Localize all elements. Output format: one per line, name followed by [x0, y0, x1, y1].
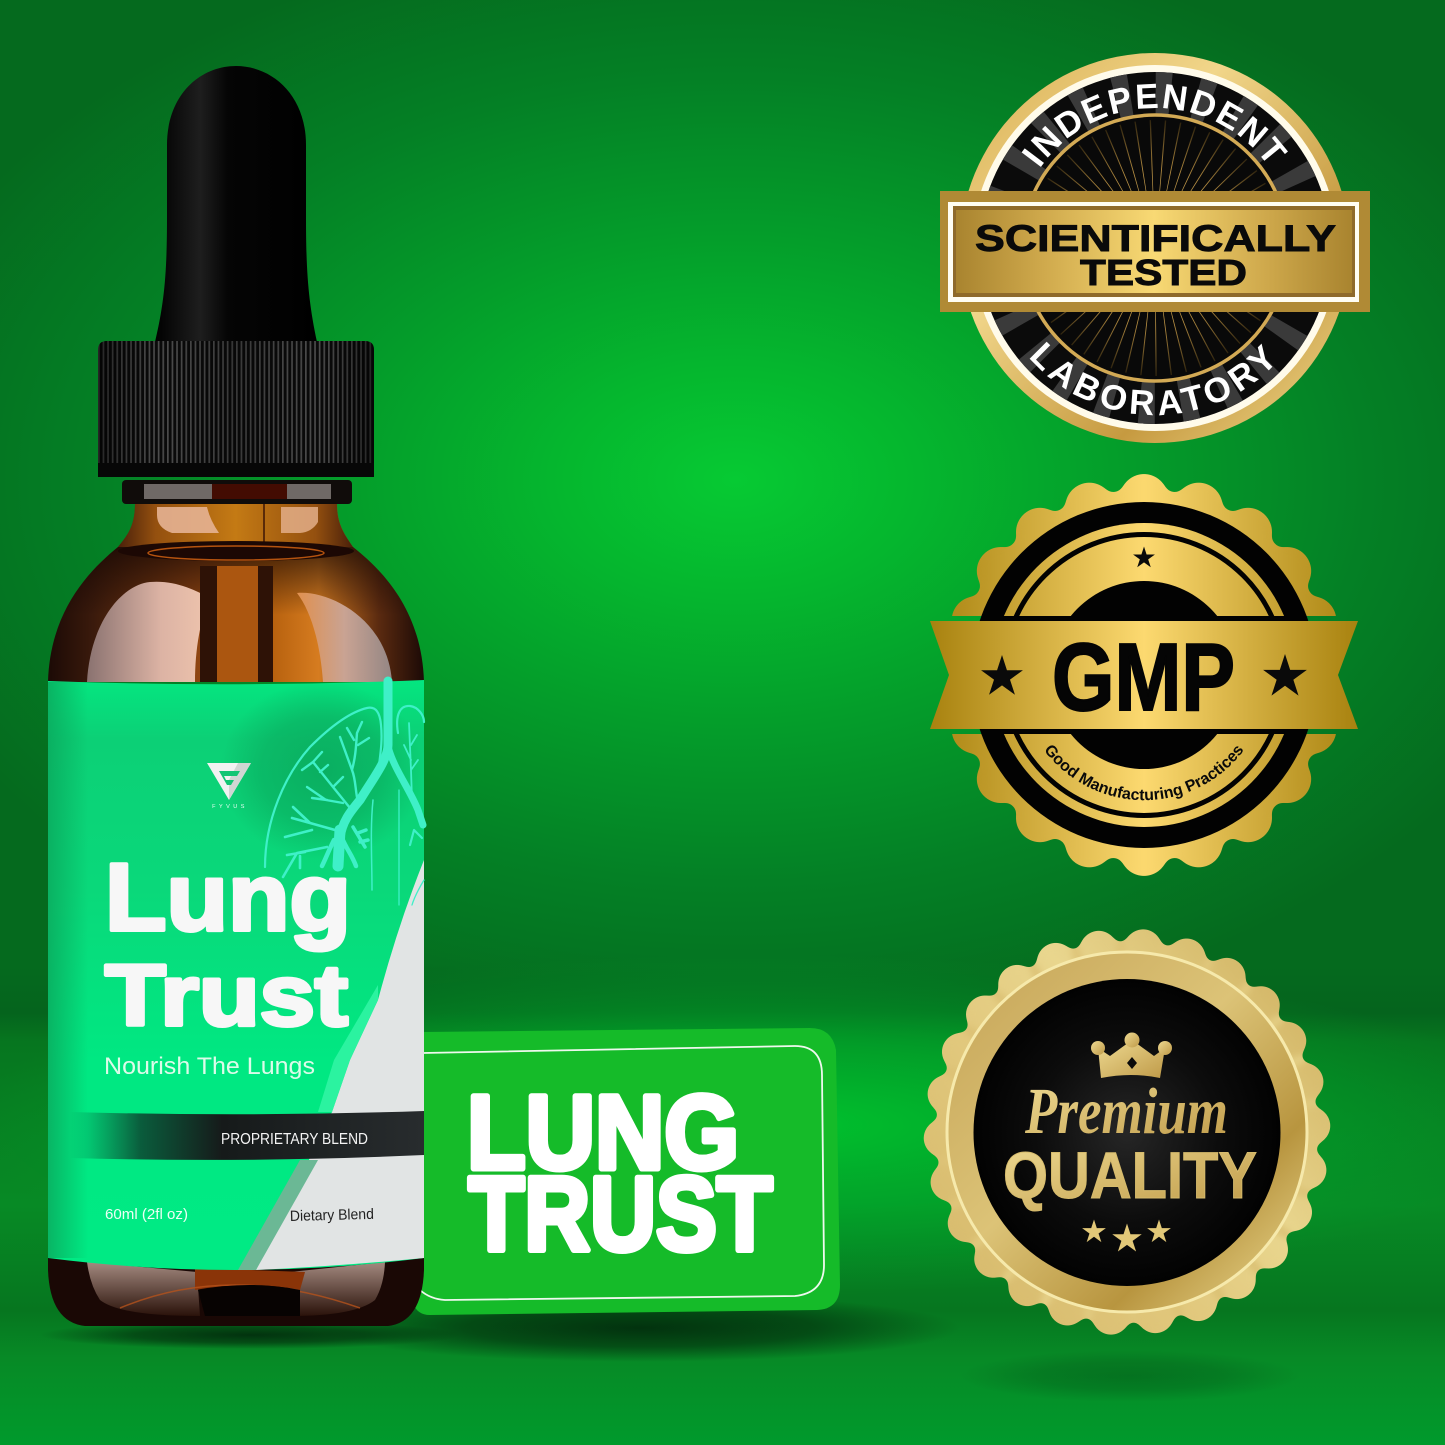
gold ring	[947, 952, 1307, 1312]
scalloped edge	[959, 490, 1329, 860]
black ring	[971, 502, 1317, 848]
sticker	[413, 1028, 840, 1315]
left star	[981, 655, 1023, 695]
inner disc	[1022, 115, 1288, 381]
sticker text: TRUST	[468, 1156, 772, 1273]
inner disc	[1050, 581, 1238, 769]
dietary note: Dietary Blend	[290, 1206, 374, 1225]
product bottle	[48, 66, 424, 1326]
brand logo: FYVUS	[212, 804, 248, 810]
label stripe	[318, 985, 378, 1112]
badge: GMP	[930, 474, 1358, 876]
badge shadow	[960, 1350, 1300, 1402]
badge: premium quality	[927, 932, 1327, 1332]
ribbon	[940, 191, 1370, 312]
ring stripes	[1000, 93, 1310, 403]
premium: Premium	[1024, 1075, 1228, 1148]
gold rings	[992, 523, 1296, 827]
sticker text	[467, 1074, 772, 1273]
arc text top: INDEPENDENT	[1022, 84, 1288, 167]
scalloped edge	[927, 932, 1327, 1332]
badge: scientifically tested	[940, 53, 1370, 443]
sticker text: LUNG	[467, 1074, 739, 1192]
glass base	[48, 1250, 424, 1326]
ribbon text: TESTED	[1080, 252, 1247, 293]
product name: Lung	[105, 844, 351, 951]
bottle collar	[122, 480, 352, 504]
blend band	[70, 1111, 424, 1160]
label stripe lower	[238, 1160, 318, 1270]
stars	[1082, 1220, 1171, 1252]
product name: Trust	[105, 948, 348, 1044]
volume: 60ml (2fl oz)	[105, 1207, 188, 1223]
right star	[1263, 654, 1307, 696]
blend band: PROPRIETARY BLEND	[221, 1131, 368, 1148]
floor shadow	[40, 1294, 960, 1362]
ribbon text: SCIENTIFICALLY	[975, 218, 1336, 259]
arc text: Good Manufacturing Practices	[1046, 745, 1243, 800]
dropper cap	[98, 341, 374, 477]
arc text bottom: LABORATORY	[1030, 342, 1272, 416]
crown	[1091, 1032, 1172, 1078]
outer ring	[960, 53, 1350, 443]
GMP text: GMP	[1052, 624, 1235, 731]
dropper bulb	[155, 66, 317, 342]
black disc	[974, 979, 1280, 1286]
brand logo	[207, 763, 251, 810]
quality: QUALITY	[1003, 1138, 1257, 1212]
ribbon text	[975, 218, 1336, 293]
top star	[1133, 546, 1155, 567]
ribbon	[930, 621, 1358, 729]
lung illustration	[265, 681, 424, 905]
tagline: Nourish The Lungs	[104, 1053, 315, 1080]
white label wedge	[256, 860, 424, 1270]
bottle label	[48, 680, 424, 1270]
amber glass	[48, 504, 424, 682]
sunburst	[1089, 182, 1221, 314]
product name	[105, 844, 351, 1044]
